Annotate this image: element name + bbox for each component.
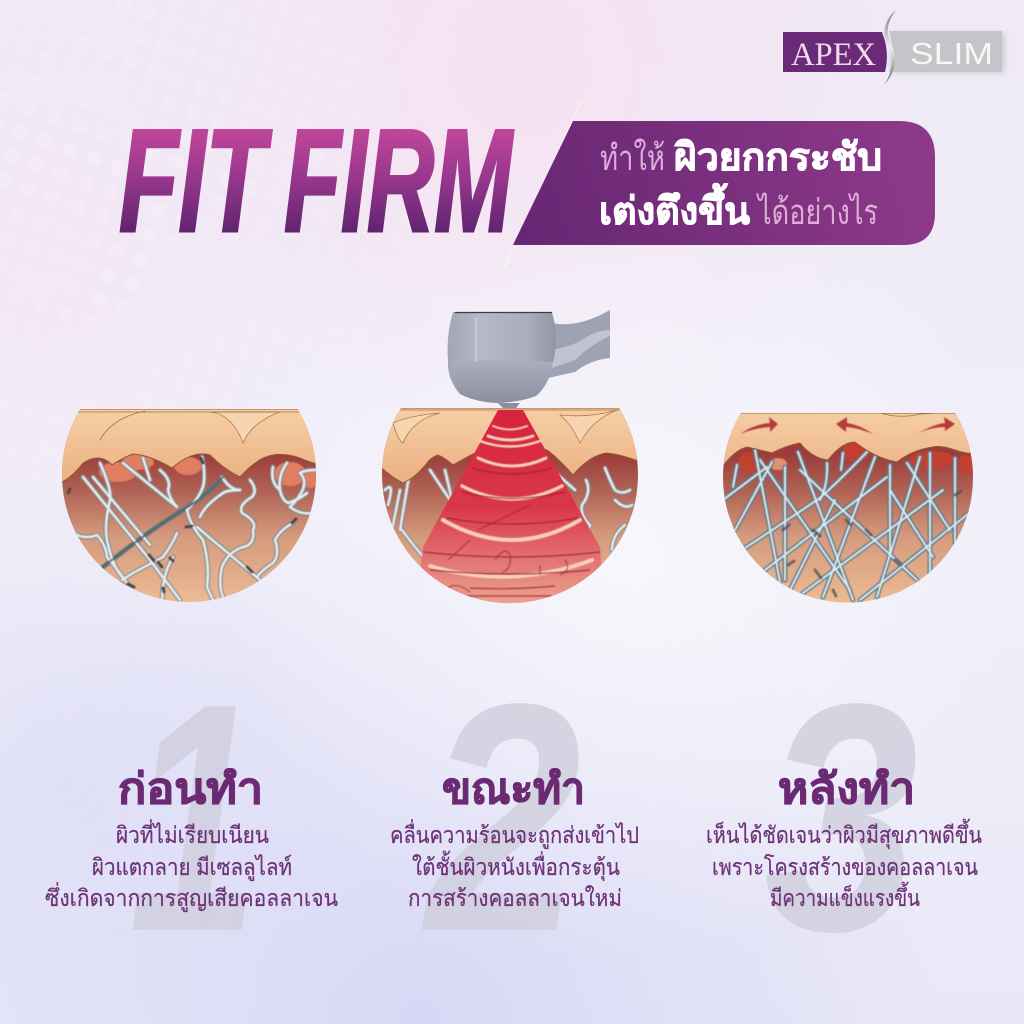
collagen fibres, slack: [68, 457, 317, 600]
watermark number 1: 1: [129, 637, 259, 1000]
wrinkle dimple: [210, 412, 280, 443]
step 1 heading: ก่อนทำ: [118, 765, 263, 812]
subtitle line 1: ทำให้: [600, 138, 665, 178]
step 2 body: [390, 819, 639, 911]
epidermis layer: [375, 408, 645, 483]
title: FIT FIRM: [119, 99, 514, 262]
step 2 body: คลื่นความร้อนจะถูกส่งเข้าไป: [390, 819, 639, 849]
logo: Apex Slim: SLIM: [910, 36, 993, 71]
step 3 heading: หลังทำ: [778, 765, 915, 812]
background: [0, 0, 810, 1024]
panel: skin before treatment: [62, 409, 316, 602]
subtitle line 1: ผิวยกกระชับ: [674, 137, 882, 179]
step 2 body: ใต้ชั้นผิวหนังเพื่อกระตุ้น: [412, 851, 620, 881]
step 1 body: ซึ่งเกิดจากการสูญเสียคอลลาเจน: [45, 882, 338, 912]
decorative light slash: [504, 100, 582, 268]
subtitle line 2: ได้อย่างไร: [756, 192, 878, 232]
subtitle banner: [513, 121, 935, 245]
title: FIT FIRM: FIRM: [284, 99, 514, 262]
collagen fibres, taut: [723, 450, 973, 600]
step 1 text: [45, 765, 338, 912]
step 3 body: มีความแข็งแรงขึ้น: [770, 882, 920, 911]
subtitle line 2: [599, 183, 878, 233]
logo: Apex Slim: APEX: [791, 37, 876, 73]
step 2 text: [390, 765, 639, 911]
subtitle line 2: เต่งตึงขึ้น: [599, 183, 750, 233]
step 2 heading: ขณะทำ: [442, 765, 585, 812]
step 1 body: ผิวที่ไม่เรียบเนียน: [116, 819, 269, 848]
step 3 body: เพราะโครงสร้างของคอลลาเจน: [712, 854, 978, 880]
step 1 body: [45, 819, 338, 912]
arrows: skin tightening: [740, 417, 955, 434]
watermark number 3: 3: [764, 637, 919, 1000]
step 1 body: ผิวแตกลาย มีเซลลูไลท์: [92, 854, 292, 881]
icon: ultrasound handpiece: [448, 310, 610, 408]
step 3 body: [706, 819, 982, 911]
panel: skin after treatment: [723, 413, 973, 603]
panel: skin during treatment: [382, 408, 638, 604]
watermark number 2: 2: [422, 637, 581, 1000]
wrinkle dimples: [393, 413, 440, 443]
step 2 body: การสร้างคอลลาเจนใหม่: [408, 885, 622, 911]
title: FIT FIRM: FIT: [119, 99, 272, 262]
step 3 text: [706, 765, 982, 911]
step 3 body: เห็นได้ชัดเจนว่าผิวมีสุขภาพดีขึ้น: [706, 819, 982, 849]
epidermis layer: [55, 409, 325, 486]
heat wave cone: [415, 410, 605, 612]
epidermis layer: [724, 413, 971, 466]
logo: Apex Slim: [783, 10, 1005, 85]
